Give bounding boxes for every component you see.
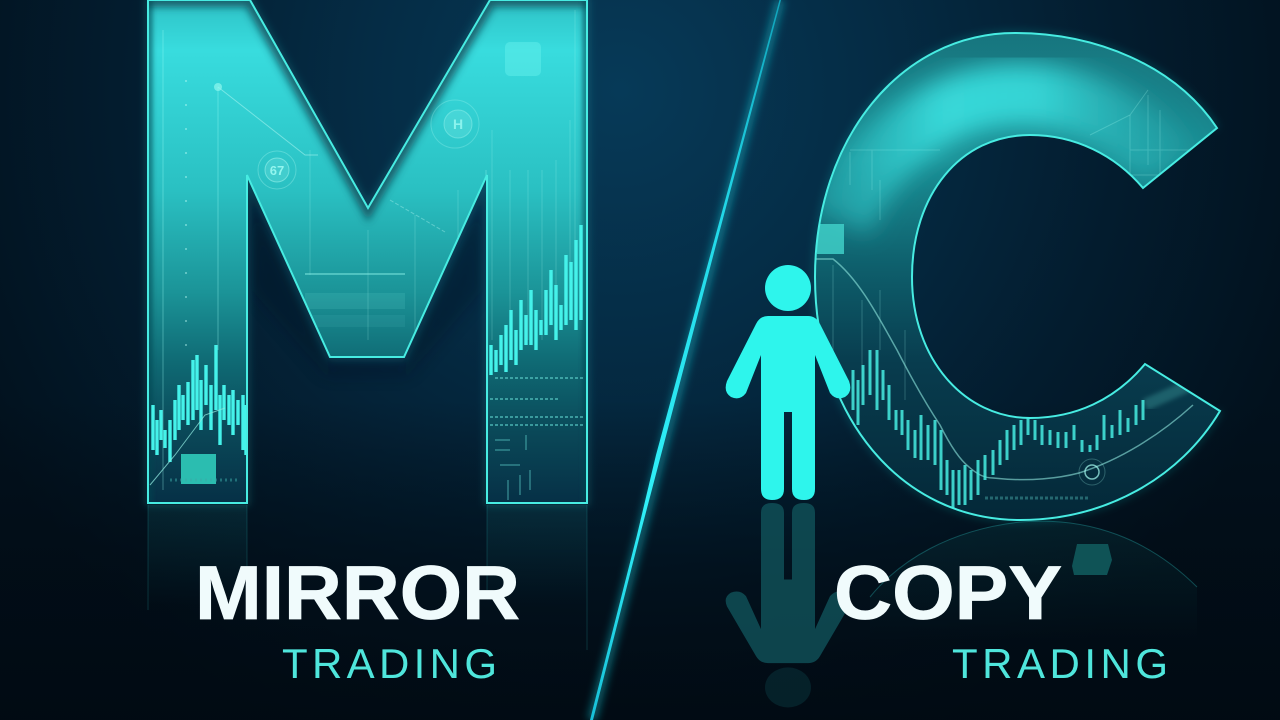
C chart details	[815, 90, 1195, 510]
C candles	[853, 350, 1143, 510]
M right candles	[490, 225, 585, 500]
label: Mirror Trading	[195, 551, 520, 687]
M fill	[148, 0, 587, 503]
icon: coin right: H	[453, 116, 463, 132]
person figure	[726, 265, 850, 500]
M left candles	[150, 345, 246, 485]
C reflection	[870, 521, 1197, 640]
letter M panel	[140, 0, 595, 650]
slash divider	[590, 0, 781, 720]
label: Mirror Trading: TRADING	[282, 640, 497, 687]
icon: coin left	[258, 151, 296, 189]
M outline	[148, 0, 587, 503]
C glow	[815, 33, 1220, 520]
M outer glow	[148, 0, 587, 503]
square tile	[505, 42, 541, 76]
person reflection	[726, 503, 850, 707]
letter C panel	[815, 33, 1220, 640]
label: Mirror Trading: MIRROR	[195, 551, 520, 636]
icon: coin on C	[1079, 459, 1105, 485]
icon: coin left: 67	[270, 163, 284, 178]
label: Copy Trading: COPY	[834, 551, 1062, 636]
label: Copy Trading: TRADING	[952, 640, 1168, 687]
M chart details	[140, 0, 595, 503]
icon: coin right	[431, 100, 479, 148]
M reflection	[148, 505, 587, 650]
C fill	[815, 33, 1220, 520]
label: Copy Trading	[834, 551, 1168, 687]
C outline	[815, 33, 1220, 520]
M shadow	[252, 200, 482, 375]
